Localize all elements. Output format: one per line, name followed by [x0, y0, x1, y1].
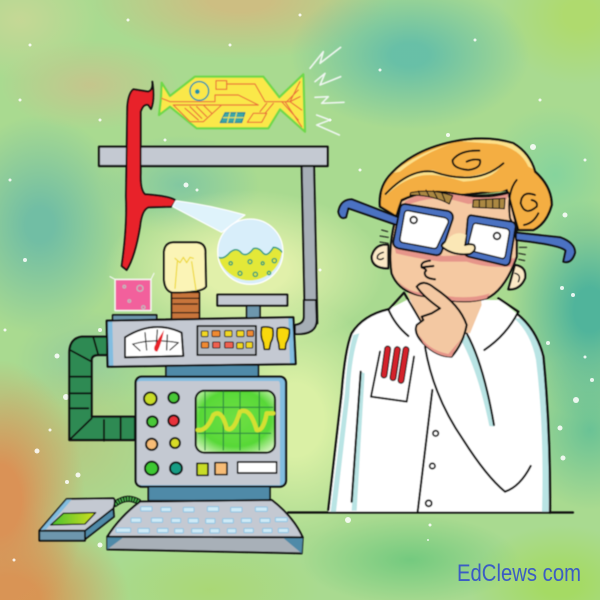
shelf beam	[99, 147, 328, 166]
red pipe	[122, 82, 176, 270]
cable to keypad	[115, 499, 138, 504]
hair highlights	[387, 138, 534, 195]
fish circuit traces	[162, 81, 302, 127]
round flask	[218, 219, 283, 284]
mouth	[421, 261, 435, 279]
keyboard	[107, 500, 303, 553]
post bend tube	[295, 300, 317, 334]
coat outline	[328, 309, 550, 513]
face	[390, 192, 517, 301]
right ear	[508, 265, 525, 289]
neck	[407, 290, 482, 333]
light cone	[173, 201, 245, 232]
control panel	[107, 317, 296, 367]
glasses frames	[393, 204, 516, 265]
light bulb	[164, 242, 206, 320]
signature: EdClews com	[457, 560, 581, 587]
scientist head	[338, 138, 575, 357]
coat fold lines and collar	[352, 309, 531, 512]
coat buttons	[426, 431, 438, 506]
hair front	[382, 139, 535, 202]
square buttons	[197, 462, 277, 475]
face pink shading	[394, 192, 515, 301]
nose	[442, 233, 475, 254]
collar ends	[388, 293, 518, 320]
pink beaker	[110, 273, 157, 322]
side hair ticks	[380, 230, 527, 261]
pocket with pens	[371, 349, 414, 402]
computer machine	[39, 300, 317, 553]
fish chip	[220, 113, 245, 123]
indicator buttons	[197, 326, 256, 355]
fish eye	[190, 82, 209, 100]
screen with waveform	[196, 391, 275, 453]
neck upper	[166, 365, 258, 377]
gauge	[125, 327, 183, 357]
hand with pointing finger	[416, 283, 467, 357]
glasses arms	[338, 199, 575, 262]
flask stand	[217, 295, 287, 320]
hair back	[380, 139, 552, 230]
table line	[288, 511, 573, 514]
glasses lenses	[400, 211, 509, 259]
eyebrows	[410, 190, 505, 209]
fish circuit	[159, 74, 305, 132]
grey post	[302, 166, 317, 323]
hair curl lines	[380, 139, 552, 230]
green cable	[69, 337, 135, 441]
coat shading	[331, 318, 549, 512]
left ear	[372, 245, 388, 268]
buzz marks	[310, 47, 344, 135]
yellow bulbs	[261, 327, 289, 349]
neck lower	[148, 487, 270, 501]
round buttons	[144, 392, 182, 475]
keypad	[39, 498, 115, 541]
monitor body	[136, 377, 286, 487]
pupils	[410, 217, 500, 239]
scientist body: lab coat	[328, 300, 550, 513]
